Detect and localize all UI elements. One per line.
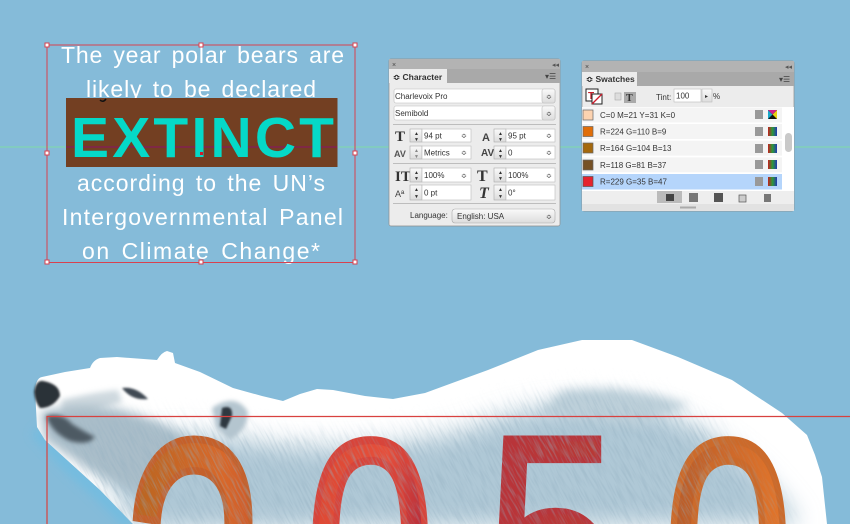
selection frame and handles (45, 43, 357, 264)
source text: according to the UN’s (77, 170, 325, 196)
type settings row 4: T (479, 185, 490, 202)
intro text: likely to be declared (86, 76, 316, 102)
intro text (61, 42, 344, 102)
character title bar: ▾☰ (545, 72, 556, 81)
language selector: English: USA (457, 212, 505, 221)
swatch row: R=118 G=81 B=37 (582, 157, 782, 172)
swatches title bar: ≎ Swatches (586, 74, 635, 84)
swatches title bar: ▾☰ (779, 75, 790, 84)
highlight box with the word EXTINCT: EXTINCT (71, 106, 334, 170)
type settings row 3: 100% (424, 171, 444, 180)
type settings row 1: ▲ (498, 131, 503, 137)
font style selector: Semibold (395, 109, 428, 118)
swatch row: R=164 G=104 B=13 (582, 141, 782, 156)
language selector: Language: (410, 211, 448, 220)
font family selector: Charlevoix Pro (395, 92, 448, 101)
language selector: ≎ (546, 214, 552, 221)
type settings row 2: Metrics (424, 148, 450, 158)
swatch toolbar: T (588, 91, 594, 102)
bear ear (212, 401, 248, 440)
type settings row 2: 0 (508, 148, 513, 158)
type settings row 1: ≎ (546, 133, 552, 140)
font family selector (394, 89, 555, 103)
font style selector (394, 106, 555, 120)
type settings row 4 (395, 185, 555, 202)
type settings row 1 (395, 129, 555, 145)
type settings row 1: 95 pt (508, 132, 527, 140)
polar bear illustration (32, 340, 827, 524)
type settings row 3: 100% (508, 171, 528, 180)
type settings row 4: ▲ (498, 187, 503, 193)
type settings row 2: ▼ (498, 154, 503, 160)
intro text: The year polar bears are (61, 42, 344, 68)
panel: swatches (582, 61, 794, 211)
swatch toolbar (586, 89, 720, 104)
type settings row 4: 0 pt (424, 188, 438, 198)
swatch row: R=118 G=81 B=37: R=118 G=81 B=37 (600, 161, 667, 170)
swatch row: C=0 M=21 Y=31 K=0 (582, 108, 782, 122)
swatches title bar: × (585, 64, 589, 71)
bear mouth (46, 415, 95, 443)
text frame (45, 42, 357, 264)
scrollbar (785, 133, 792, 152)
type settings row 4: ▼ (498, 194, 503, 200)
swatch row: C=0 M=21 Y=31 K=0: C=0 M=21 Y=31 K=0 (600, 111, 676, 120)
swatch row: R=164 G=104 B=13: R=164 G=104 B=13 (600, 144, 672, 153)
character title bar (389, 59, 560, 83)
type settings row 3: ▲ (414, 170, 419, 176)
swatch toolbar: 100 (676, 92, 690, 100)
type settings row 2: AV (394, 149, 406, 159)
swatch row: R=224 G=110 B=9 (582, 124, 782, 139)
language selector (410, 209, 555, 223)
type settings row 1: ▼ (498, 137, 503, 143)
type settings row 2: AV (481, 148, 494, 159)
source text: Intergovernmental Panel (62, 204, 343, 230)
type settings row 3: ≎ (546, 173, 552, 180)
red baseline frame guide (47, 416, 850, 524)
type settings row 4: ▼ (414, 194, 419, 200)
type settings row 3: T (477, 168, 488, 185)
bear nose (34, 381, 60, 408)
cursor mark (100, 99, 106, 101)
type settings row 3: ▼ (498, 176, 503, 182)
source text (62, 170, 343, 264)
swatch bottom toolbar (582, 191, 794, 211)
character title bar: × (392, 62, 396, 69)
type settings row 2: ▲ (414, 148, 419, 154)
swatch toolbar: T (626, 93, 633, 104)
year 2050 (132, 436, 786, 524)
type settings row 4: ▲ (414, 187, 419, 193)
type settings row 4: Aª (395, 189, 405, 199)
type settings row 3: ▲ (498, 170, 503, 176)
type settings row 4: 0° (508, 188, 516, 198)
type settings row 1: A (482, 132, 490, 144)
green guide line (0, 146, 850, 148)
panel: character (389, 59, 560, 226)
swatch row: R=229 G=35 B=47 selected (582, 174, 782, 190)
type settings row 3: IT (395, 169, 411, 185)
type settings row 2: ≎ (546, 150, 552, 157)
swatches title bar (582, 61, 794, 86)
swatches title bar: ◂◂ (785, 64, 793, 71)
character title bar: ◂◂ (552, 62, 560, 69)
type settings row 1: T (395, 129, 405, 145)
swatch toolbar: % (713, 92, 720, 101)
swatch row: R=224 G=110 B=9: R=224 G=110 B=9 (600, 128, 667, 136)
type settings row 3: ▼ (414, 176, 419, 182)
font style selector: ≎ (546, 111, 552, 118)
character title bar: ≎ Character (393, 72, 443, 82)
type settings row 2: ▲ (498, 148, 503, 154)
type settings row 1: ≎ (461, 133, 467, 140)
type settings row 3 (395, 168, 555, 185)
type settings row 2: ≎ (461, 150, 467, 157)
source text: on Climate Change* (82, 238, 320, 264)
type settings row 3: ≎ (461, 173, 467, 180)
swatch toolbar: ▸ (705, 94, 708, 100)
bear eye (122, 388, 148, 399)
type settings row 1: 94 pt (424, 132, 443, 140)
type settings row 1: ▼ (414, 137, 419, 143)
font family selector: ≎ (546, 94, 552, 101)
blue glow beside the bear (36, 430, 130, 524)
swatch toolbar: Tint: (656, 93, 671, 102)
type settings row 2 (394, 146, 555, 160)
type settings row 2: ▼ (414, 154, 419, 160)
type settings row 1: ▲ (414, 131, 419, 137)
swatch row: R=229 G=35 B=47 selected: R=229 G=35 B=47 (600, 178, 667, 186)
